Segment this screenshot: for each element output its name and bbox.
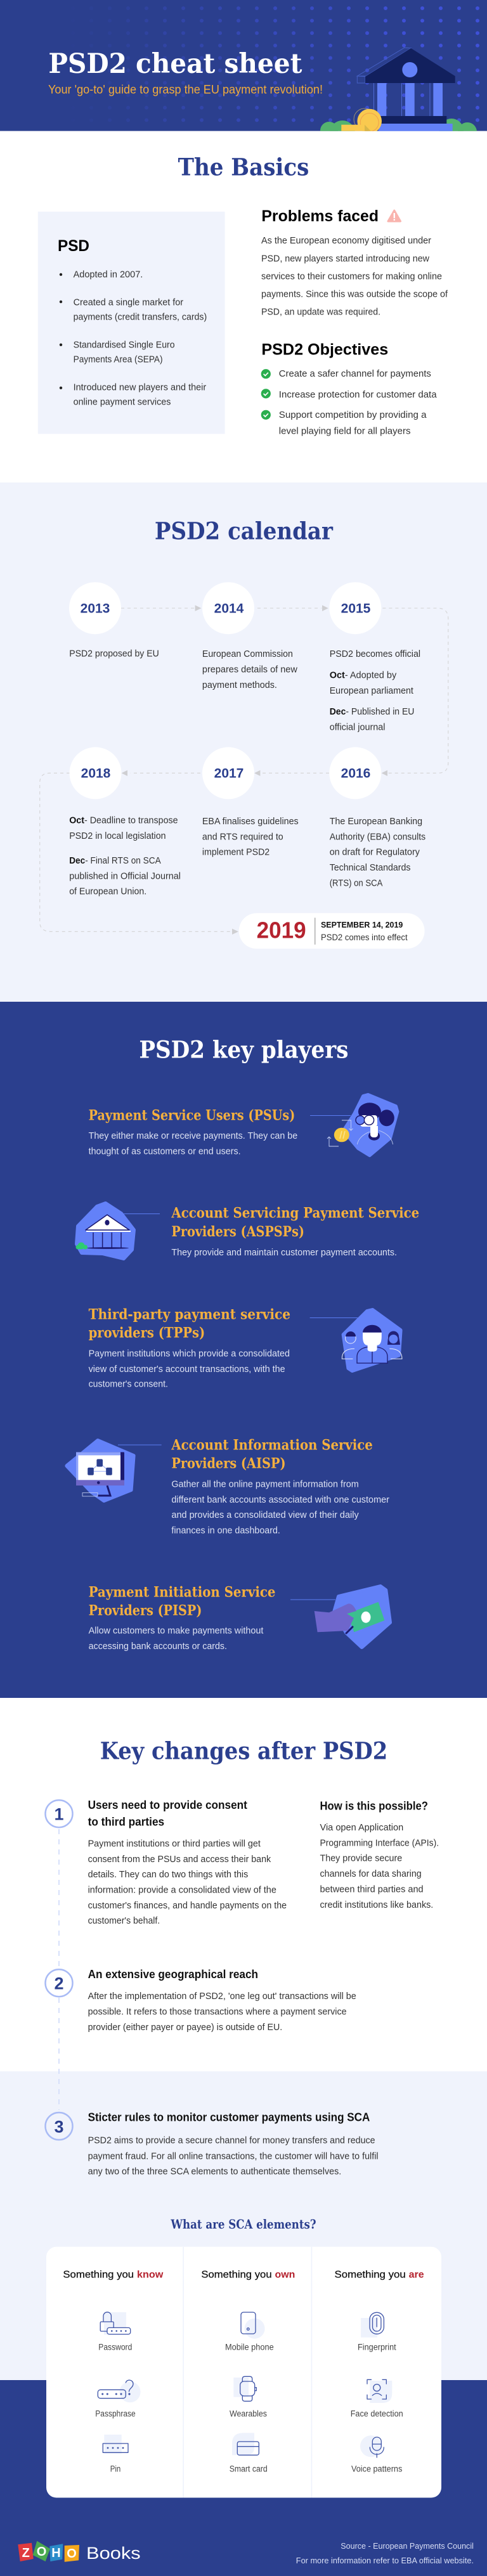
PSD bullet list: Standardised Single Euro bbox=[74, 340, 175, 351]
change 1: consent from the PSUs and access their bank bbox=[88, 1854, 271, 1865]
element: pin bbox=[103, 2435, 128, 2473]
side note: How is this possible?: Programming Interface (APIs). bbox=[320, 1839, 439, 1849]
PSD bullet list: payments (credit transfers, cards) bbox=[74, 313, 207, 323]
problems paragraph: payments. Since this was outside the scope of bbox=[261, 289, 448, 299]
text: 2017: EBA finalises guidelines bbox=[202, 817, 299, 827]
year 2016: 2016 bbox=[341, 766, 370, 781]
panel: PSD2 key players bbox=[0, 1002, 487, 1698]
text: 2018: published in Official Journal bbox=[69, 872, 181, 882]
PSD bullet list: Adopted in 2007. bbox=[74, 270, 143, 280]
subtitle: Your 'go-to' guide to grasp the EU payment revolution! bbox=[48, 83, 323, 96]
change 1: customer's behalf. bbox=[88, 1916, 160, 1926]
text: 2018: Dec- Final RTS on SCA bbox=[69, 856, 161, 866]
year 2018: 2018 bbox=[81, 766, 111, 781]
change 3 bbox=[46, 2111, 379, 2177]
text: 2018: of European Union. bbox=[69, 887, 146, 897]
text: 2017: implement PSD2 bbox=[202, 847, 269, 857]
heading: What are SCA elements?: What are SCA elements? bbox=[171, 2217, 316, 2232]
PSD bullet list: online payment services bbox=[74, 397, 171, 407]
source note: For more information refer to EBA official website. bbox=[296, 2556, 474, 2565]
player: TPPs: customer's consent. bbox=[89, 1379, 168, 1390]
player: PISP: Providers (PISP) bbox=[89, 1602, 202, 1619]
step number 3: 3 bbox=[54, 2117, 64, 2136]
PSD bullet list bbox=[60, 270, 207, 407]
heading: The Basics: The Basics bbox=[178, 153, 309, 181]
step number 3 bbox=[46, 2113, 72, 2140]
change 3: payment fraud. For all online transactions, the customer will have to fulfil bbox=[88, 2152, 379, 2162]
player: AISP: Account Information Service bbox=[171, 1437, 373, 1453]
heading: Key changes after PSD2: Key changes after PSD2 bbox=[100, 1737, 387, 1765]
change 3: any two of the three SCA elements to authenticate themselves. bbox=[88, 2167, 341, 2177]
callout: 2019: PSD2 comes into effect bbox=[321, 933, 408, 942]
panel: Problems faced: Problems faced bbox=[261, 207, 379, 225]
text: 2016: Authority (EBA) consults bbox=[330, 832, 425, 842]
callout: 2019: 2019 bbox=[257, 917, 306, 943]
year 2014: 2014 bbox=[214, 601, 244, 616]
PSD bullet list: Introduced new players and their bbox=[74, 383, 206, 393]
PSD bullet list: Payments Area (SEPA) bbox=[74, 355, 163, 365]
element: smart card bbox=[230, 2433, 268, 2473]
panel: footer background bbox=[0, 2380, 487, 2576]
element: smart card: Smart card bbox=[230, 2464, 268, 2473]
column header: know: Something you bbox=[63, 2269, 134, 2280]
side note: How is this possible?: credit institutions like banks. bbox=[320, 1900, 433, 1910]
panel: PSD bbox=[38, 212, 225, 434]
player: AISP: Providers (AISP) bbox=[171, 1455, 286, 1472]
change 2: An extensive geographical reach bbox=[88, 1968, 258, 1981]
change 2 bbox=[46, 1968, 356, 2033]
text: 2015: European parliament bbox=[330, 686, 413, 696]
element: wearables bbox=[230, 2376, 267, 2419]
step number 2: 2 bbox=[54, 1974, 64, 1993]
element: wearables: Wearables bbox=[230, 2409, 267, 2419]
logo: Zoho Books: O bbox=[67, 2547, 77, 2561]
panel: SCA elements card bbox=[46, 2247, 441, 2498]
element: mobile phone bbox=[225, 2312, 274, 2352]
side note: How is this possible?: They provide secure bbox=[320, 1854, 402, 1864]
element: password: Password bbox=[98, 2343, 132, 2352]
player: ASPSPs: Providers (ASPSPs) bbox=[171, 1224, 304, 1240]
year 2014 bbox=[202, 582, 254, 634]
objectives list: Create a safer channel for payments bbox=[279, 369, 431, 379]
column header: are: Something you bbox=[335, 2269, 406, 2280]
player: PISP: Allow customers to make payments without bbox=[89, 1625, 264, 1636]
logo: Zoho Books bbox=[18, 2541, 141, 2563]
player: PISP: Payment Initiation Service bbox=[89, 1584, 275, 1600]
text: 2013: PSD2 proposed by EU bbox=[69, 649, 159, 659]
panel: header banner bbox=[0, 0, 487, 146]
year 2015: 2015 bbox=[341, 601, 371, 616]
text: 2014: European Commission bbox=[202, 649, 293, 659]
change 1: customer's finances, and handle payments on the bbox=[88, 1901, 287, 1911]
player: ASPSPs bbox=[76, 1203, 419, 1259]
column header: are: are bbox=[409, 2269, 424, 2280]
element: fingerprint: Fingerprint bbox=[358, 2343, 396, 2352]
text: 2018 bbox=[69, 815, 181, 897]
year 2013: 2013 bbox=[81, 601, 110, 616]
side note: How is this possible?: Via open Application bbox=[320, 1823, 403, 1833]
side note: How is this possible?: between third parties and bbox=[320, 1884, 424, 1894]
text: 2016: on draft for Regulatory bbox=[330, 847, 420, 857]
year 2015 bbox=[329, 582, 381, 634]
element: face detection: Face detection bbox=[351, 2409, 403, 2419]
element: fingerprint bbox=[358, 2312, 396, 2352]
text: 2016: (RTS) on SCA bbox=[330, 878, 383, 888]
text: 2017 bbox=[202, 817, 299, 857]
player: TPPs: providers (TPPs) bbox=[89, 1324, 205, 1341]
timeline arrows bbox=[40, 605, 448, 935]
title: PSD2 cheat sheet bbox=[48, 48, 302, 80]
source note bbox=[296, 2541, 474, 2565]
year 2013 bbox=[69, 582, 121, 634]
year 2017 bbox=[202, 747, 254, 799]
player: TPPs: Third-party payment service bbox=[89, 1306, 290, 1323]
icon: monitor with database network bbox=[67, 1440, 134, 1501]
text: 2016 bbox=[330, 817, 425, 888]
icon: user with coin bbox=[327, 1095, 397, 1155]
objectives list: Increase protection for customer data bbox=[279, 390, 438, 400]
step number 2 bbox=[46, 1969, 72, 1997]
icon: bank bbox=[76, 1203, 134, 1259]
change 3: PSD2 aims to provide a secure channel for money transfers and reduce bbox=[88, 2135, 375, 2146]
player: TPPs: Payment institutions which provide a consolidated bbox=[89, 1348, 290, 1359]
heading: PSD2 key players: PSD2 key players bbox=[139, 1035, 348, 1063]
player: PISP bbox=[89, 1584, 390, 1652]
player: TPPs bbox=[89, 1306, 402, 1390]
element: face detection bbox=[351, 2379, 403, 2419]
text: 2018: Oct- Deadline to transpose bbox=[69, 815, 178, 825]
text: 2015: official journal bbox=[330, 723, 386, 733]
objectives list bbox=[279, 369, 438, 436]
logo: Zoho Books: O bbox=[37, 2545, 46, 2559]
text: 2016: Technical Standards bbox=[330, 863, 411, 873]
step number 1: 1 bbox=[54, 1804, 64, 1823]
callout: 2019 bbox=[239, 913, 425, 948]
player: ASPSPs: They provide and maintain customer payment accounts. bbox=[171, 1247, 397, 1258]
objectives list: level playing field for all players bbox=[279, 426, 411, 436]
PSD heading: PSD bbox=[58, 237, 89, 255]
text: 2014: payment methods. bbox=[202, 680, 277, 690]
element: mobile phone: Mobile phone bbox=[225, 2343, 274, 2352]
source note: Source - European Payments Council bbox=[341, 2541, 474, 2551]
player: AISP: finances in one dashboard. bbox=[171, 1525, 280, 1536]
year 2016 bbox=[329, 747, 381, 799]
year 2018 bbox=[70, 747, 122, 799]
icon: bank building with coin bbox=[320, 47, 477, 131]
player: AISP: different bank accounts associated with one customer bbox=[171, 1494, 389, 1505]
player: PISP: accessing bank accounts or cards. bbox=[89, 1641, 227, 1652]
logo: Zoho Books: Z bbox=[22, 2546, 30, 2560]
panel: SCA light background bbox=[0, 2071, 487, 2380]
player: AISP: Gather all the online payment information from bbox=[171, 1479, 359, 1490]
year 2017: 2017 bbox=[214, 766, 244, 781]
text: 2015: PSD2 becomes official bbox=[330, 649, 420, 659]
player: TPPs: view of customer's account transactions, with the bbox=[89, 1364, 285, 1375]
side note: How is this possible?: channels for data sharing bbox=[320, 1869, 422, 1879]
callout: 2019: SEPTEMBER 14, 2019 bbox=[321, 920, 403, 929]
player: AISP: and provides a consolidated view of their daily bbox=[171, 1510, 359, 1520]
PSD bullet list: Created a single market for bbox=[74, 298, 183, 308]
problems paragraph: PSD, new players started introducing new bbox=[261, 254, 430, 264]
panel: PSD2 Objectives bbox=[261, 341, 438, 436]
icon: three people bbox=[342, 1310, 402, 1371]
logo: Zoho Books: Books bbox=[86, 2544, 141, 2563]
heading: PSD2 calendar: PSD2 calendar bbox=[155, 517, 333, 545]
element: passphrase bbox=[95, 2380, 141, 2419]
player: PSUs bbox=[89, 1095, 397, 1156]
side note: How is this possible?: How is this possible? bbox=[320, 1799, 428, 1812]
problems paragraph: services to their customers for making online bbox=[261, 271, 442, 282]
change 2: provider (either payer or payee) is outside of EU. bbox=[88, 2023, 282, 2033]
objectives list: Support competition by providing a bbox=[279, 410, 427, 420]
player: PSUs: They either make or receive payments. They can be bbox=[89, 1130, 297, 1141]
text: 2014: prepares details of new bbox=[202, 665, 297, 675]
icon: warning triangle bbox=[388, 210, 401, 221]
element: voice patterns: Voice patterns bbox=[351, 2464, 403, 2473]
panel: Problems faced bbox=[261, 207, 448, 317]
icon: green checks bbox=[261, 369, 271, 420]
player: PSUs: thought of as customers or end users. bbox=[89, 1146, 241, 1156]
problems paragraph bbox=[261, 236, 448, 317]
change 1: to third parties bbox=[88, 1816, 164, 1828]
change 1: information: provide a consolidated view of the bbox=[88, 1886, 276, 1896]
text: 2015: Oct- Adopted by bbox=[330, 670, 397, 680]
column header: know bbox=[63, 2269, 164, 2280]
text: 2015: Dec- Published in EU bbox=[330, 707, 414, 717]
player: AISP bbox=[67, 1437, 389, 1536]
change 1: Users need to provide consent bbox=[88, 1799, 247, 1811]
step connector bbox=[58, 1829, 60, 2110]
element: pin: Pin bbox=[110, 2464, 120, 2473]
side note: How is this possible? bbox=[320, 1799, 439, 1910]
problems paragraph: As the European economy digitised under bbox=[261, 236, 431, 246]
column header: own: Something you bbox=[201, 2269, 272, 2280]
player: ASPSPs: Account Servicing Payment Service bbox=[171, 1205, 419, 1222]
change 1: Payment institutions or third parties will get bbox=[88, 1839, 261, 1849]
panel: PSD2 Objectives: PSD2 Objectives bbox=[261, 341, 388, 359]
text: 2018: PSD2 in local legislation bbox=[69, 831, 166, 841]
text: 2017: and RTS required to bbox=[202, 832, 283, 842]
change 2: After the implementation of PSD2, 'one leg out' transactions will be bbox=[88, 1991, 356, 2002]
problems paragraph: PSD, an update was required. bbox=[261, 307, 380, 317]
element: voice patterns bbox=[351, 2435, 403, 2473]
change 1 bbox=[46, 1799, 287, 1926]
column header: own: own bbox=[275, 2269, 295, 2280]
panel: PSD2 calendar bbox=[0, 482, 487, 1002]
step number 1 bbox=[46, 1800, 72, 1827]
text: 2015 bbox=[330, 649, 420, 733]
text: 2016: The European Banking bbox=[330, 817, 422, 827]
element: passphrase: Passphrase bbox=[95, 2409, 136, 2419]
change 2: possible. It refers to those transactions where a payment service bbox=[88, 2007, 347, 2017]
element: password bbox=[98, 2312, 132, 2352]
text: 2014 bbox=[202, 649, 297, 690]
change 1: details. They can do two things with this bbox=[88, 1870, 248, 1880]
column header: know: know bbox=[137, 2269, 164, 2280]
logo: Zoho Books: H bbox=[51, 2546, 61, 2560]
player: PSUs: Payment Service Users (PSUs) bbox=[89, 1108, 295, 1124]
change 3: Sticter rules to monitor customer payments using SCA bbox=[88, 2111, 370, 2124]
icon: hand giving money bbox=[315, 1586, 390, 1647]
